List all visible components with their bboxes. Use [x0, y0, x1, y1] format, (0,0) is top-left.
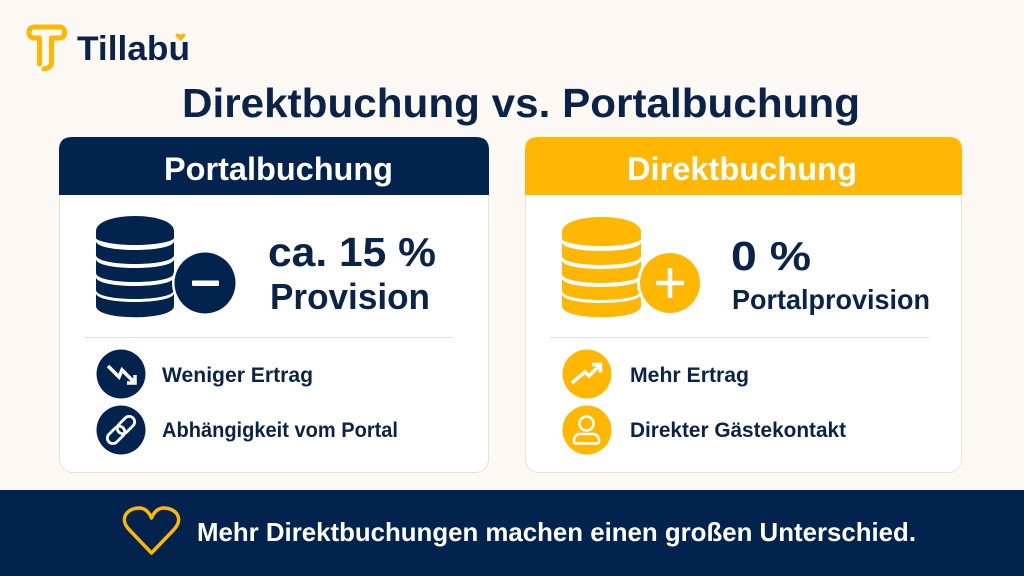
title: Direktbuchung vs. Portalbuchung	[182, 80, 860, 126]
icon: heart	[124, 508, 179, 553]
icon: logo T mark	[29, 27, 64, 69]
commission label: Provision	[270, 276, 430, 317]
label: Abhängigkeit vom Portal: Abhängigkeit vom Portal	[162, 419, 398, 442]
commission figure: 0 %	[731, 233, 811, 279]
label: Weniger Ertrag: Weniger Ertrag	[162, 364, 313, 387]
icon: falling trend	[96, 350, 146, 398]
footer banner	[0, 490, 1024, 576]
label: Mehr Ertrag: Mehr Ertrag	[630, 364, 749, 387]
icon: rising trend	[562, 350, 612, 398]
icon: logo heart	[176, 34, 185, 41]
panel header	[59, 137, 489, 195]
commission label: Portalprovision	[732, 284, 930, 315]
icon: coin stack with minus	[96, 216, 238, 317]
icon: coin stack with plus	[562, 217, 703, 317]
panel background	[526, 138, 962, 472]
panel: Direktbuchung	[525, 137, 962, 472]
footer message: Mehr Direktbuchungen machen einen großen Unterschied.	[197, 517, 916, 547]
icon: chain link	[96, 406, 146, 454]
panel heading: Portalbuchung	[164, 151, 393, 187]
panel heading: Direktbuchung	[627, 151, 857, 187]
logo: Tillabu	[29, 27, 190, 69]
icon: guest	[562, 406, 612, 454]
panel header	[525, 137, 962, 195]
panel background	[60, 138, 488, 472]
label: Direkter Gästekontakt: Direkter Gästekontakt	[630, 419, 846, 442]
commission figure: ca. 15 %	[268, 229, 436, 275]
panel: Portalbuchung	[59, 137, 489, 472]
logo wordmark: Tillabu	[77, 30, 190, 68]
